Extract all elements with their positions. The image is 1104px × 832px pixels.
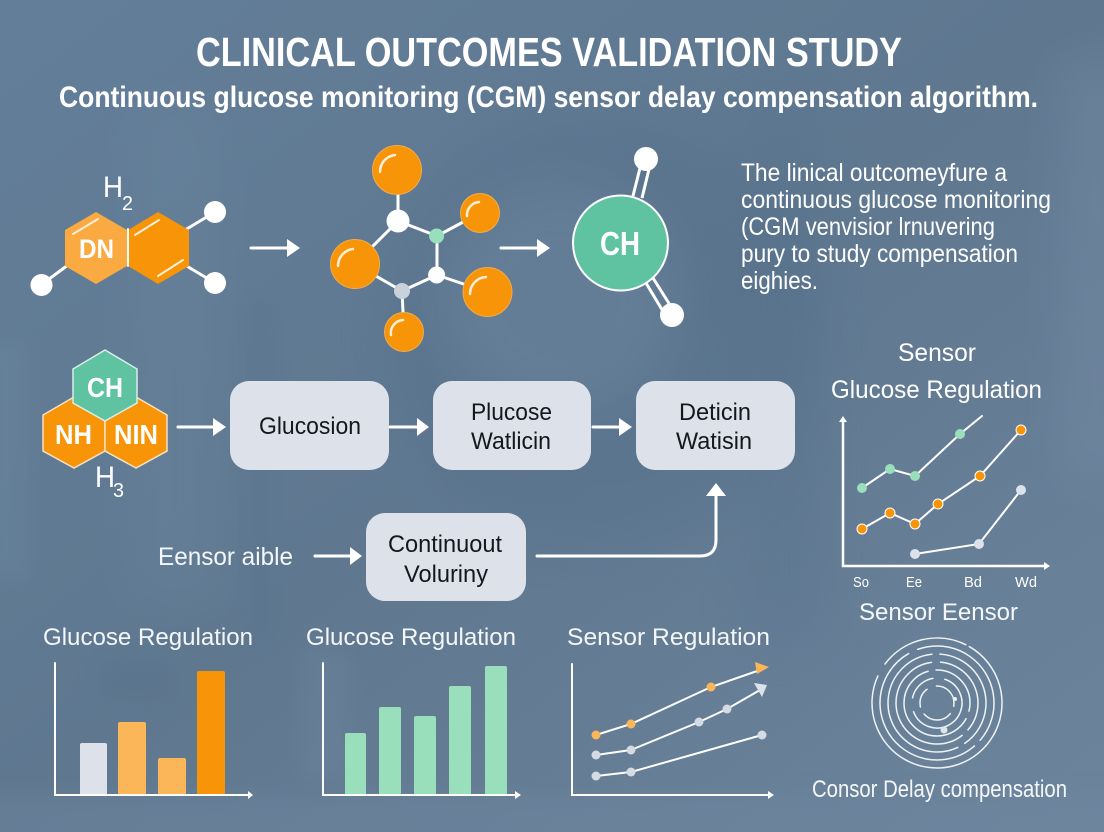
text block: description: eighies. (741, 267, 818, 295)
text block: description: The linical outcomeyfure a (741, 159, 1007, 187)
heading: sensor glucose regulation: Sensor (898, 339, 976, 367)
box: Deticin Watisin: Watisin (676, 428, 752, 455)
hexagon cluster: H (95, 461, 115, 494)
line chart: sensor glucose: Ee (906, 574, 922, 591)
line chart: sensor glucose: So (853, 574, 869, 591)
line chart (572, 662, 774, 799)
text block: description: pury to study compensation (741, 240, 1018, 268)
molecule: double hexagon (30, 171, 226, 296)
arrow (178, 418, 226, 436)
label: sensor input: Eensor aible (158, 543, 293, 571)
molecule: double hexagon: H (103, 171, 123, 204)
bar chart (55, 663, 253, 799)
line chart: sensor glucose: Wd (1015, 574, 1037, 591)
hexagon cluster: 3 (113, 480, 124, 502)
hexagon cluster: NIN (114, 419, 158, 450)
panel: glucose regulation bars 2 (306, 624, 521, 799)
box: Plucose Watlicin: Plucose (471, 399, 552, 426)
text block: description: continuous glucose monitoring (741, 186, 1051, 214)
line chart: sensor glucose: Bd (964, 574, 982, 591)
arrow (390, 418, 429, 436)
text block: description (741, 159, 1051, 295)
box: Continuout Voluriny (366, 513, 526, 601)
box: Glucosion (230, 381, 389, 470)
molecule: green CH atom (573, 147, 684, 327)
molecule: double hexagon: DN (79, 234, 114, 264)
line chart: sensor glucose (839, 416, 1050, 591)
box: Continuout Voluriny: Continuout (388, 531, 502, 558)
heading: Glucose Regulation (43, 624, 253, 651)
arrow (593, 418, 632, 436)
bar chart (323, 663, 521, 799)
text block: description: (CGM venvisior lrnuvering (741, 213, 995, 241)
icon: concentric delay rings (848, 614, 1026, 792)
molecule: orange atoms (330, 146, 512, 352)
box: Glucosion: Glucosion (259, 413, 361, 440)
panel: sensor regulation lines (567, 624, 774, 799)
heading: Glucose Regulation (306, 624, 516, 651)
title: CLINICAL OUTCOMES VALIDATION STUDY (196, 29, 902, 75)
heading: sensor glucose regulation (831, 339, 1042, 404)
box: Continuout Voluriny: Voluriny (404, 561, 488, 588)
box: Plucose Watlicin (433, 381, 591, 470)
heading: sensor glucose regulation: Glucose Regulation (831, 376, 1042, 404)
hexagon cluster: CH (87, 372, 123, 403)
molecule: double hexagon: 2 (122, 193, 133, 215)
panel: glucose regulation bars 1 (43, 624, 253, 799)
arrow (251, 239, 300, 257)
hexagon cluster (43, 350, 167, 502)
heading: Sensor Regulation (567, 624, 770, 651)
molecule: green CH atom: CH (600, 225, 640, 262)
arrow (501, 239, 550, 257)
hexagon cluster: NH (55, 419, 92, 450)
box: Deticin Watisin: Deticin (679, 399, 751, 426)
elbow arrow (537, 483, 726, 556)
box: Deticin Watisin (636, 381, 795, 470)
arrow (315, 547, 362, 565)
box: Plucose Watlicin: Watlicin (471, 428, 551, 455)
heading: sensor eensor: Sensor Eensor (859, 599, 1018, 626)
